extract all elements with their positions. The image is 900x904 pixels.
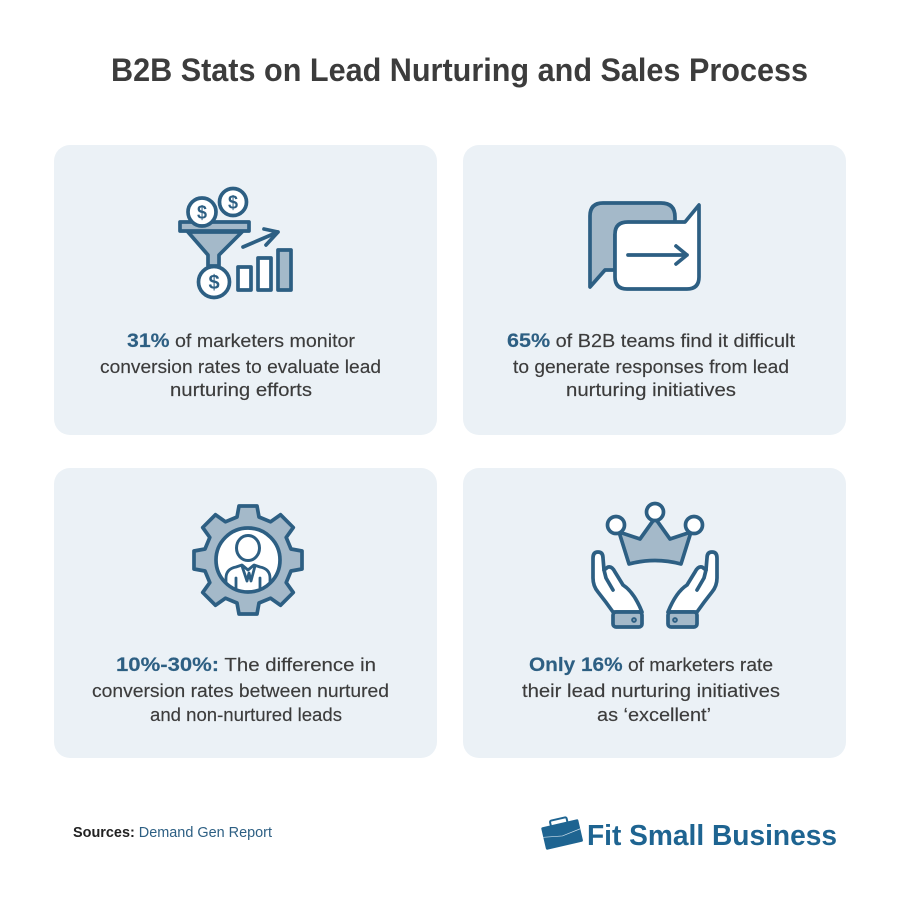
logo: Fit Small Business: Fit Small Business bbox=[587, 820, 837, 852]
stat text: 16%: Only 16% of marketers rate bbox=[529, 654, 773, 676]
panel: excellent rating bbox=[463, 468, 846, 758]
icon: gear with person bbox=[194, 506, 302, 614]
stat text: 10%-30%: 10%-30%: The difference in bbox=[116, 654, 376, 676]
panel: conversion rates: nurturing efforts bbox=[170, 380, 312, 400]
panel: excellent rating: as ‘excellent’ bbox=[597, 705, 711, 725]
icon: funnel with coins and bar chart: $ bbox=[228, 192, 238, 212]
icon: briefcase bbox=[540, 815, 583, 850]
stat text: 31%: 31% of marketers monitor bbox=[127, 330, 355, 352]
panel: excellent rating: their lead nurturing initiatives bbox=[522, 681, 780, 701]
panel: nurtured leads: conversion rates between nurtured bbox=[92, 681, 389, 701]
panel: conversion rates: conversion rates to evaluate lead bbox=[100, 357, 381, 377]
panel: nurtured leads bbox=[54, 468, 437, 758]
title: B2B Stats on Lead Nurturing and Sales Process bbox=[111, 52, 808, 88]
panel: generating responses bbox=[463, 145, 846, 435]
icon: speech bubbles with arrow bbox=[590, 203, 699, 289]
sources: Sources: Demand Gen Report bbox=[73, 825, 272, 841]
panel: nurtured leads: and non-nurtured leads bbox=[150, 705, 342, 725]
panel: generating responses: nurturing initiatives bbox=[566, 380, 736, 400]
panel: generating responses: to generate responses from lead bbox=[513, 357, 789, 377]
icon: funnel with coins and bar chart bbox=[180, 188, 291, 298]
stat text: 65%: 65% of B2B teams find it difficult bbox=[507, 330, 795, 352]
panel: conversion rates bbox=[54, 145, 437, 435]
icon: funnel with coins and bar chart: $ bbox=[208, 272, 220, 294]
icon: crown in hands bbox=[593, 504, 717, 627]
icon: funnel with coins and bar chart: $ bbox=[197, 202, 207, 222]
